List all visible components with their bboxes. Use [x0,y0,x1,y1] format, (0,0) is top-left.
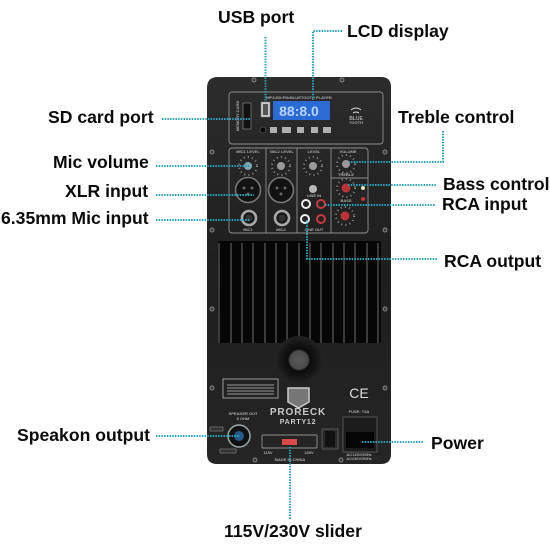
label: LCD display [313,21,449,100]
speakon output: SPEAKER OUT [229,411,258,416]
input section: VOLUME [339,149,357,154]
tone knobs [336,179,355,225]
input section: TREBLE [338,172,354,177]
input section: LINE OUT [305,227,324,232]
speakon output: 8 OHM [237,416,250,421]
SD card slot: MEMORY CARD [235,101,240,131]
power socket: AC230V/50Hz [346,456,372,461]
voltage slider: 230V [304,450,314,455]
input section: LEVEL [308,149,321,154]
LCD display: 88:8.0 [279,103,319,119]
input section: LINE IN [307,193,321,198]
screws [210,78,387,462]
label: RCA output [307,220,541,271]
label: LCD display: LCD display [347,21,449,41]
CE mark: CE [349,385,369,401]
player buttons [270,127,331,133]
brand logo: PRORECK [270,407,326,418]
label: USB port: USB port [218,7,294,27]
label: USB port [218,7,294,101]
input section: MIC1 [243,227,254,232]
label: RCA output: RCA output [444,251,541,271]
input section [229,148,368,233]
player module: MP3•SD•FM•BLUETOOTH PLAYER [266,95,332,100]
power switch [322,429,338,449]
label: XLR input: XLR input [65,181,148,201]
input section: MIC1 LEVEL [236,149,260,154]
warning label [223,379,278,398]
label: 115V/230V slider: 115V/230V slider [224,521,362,541]
bass port [275,336,323,384]
label: Power [362,433,484,453]
player module [229,92,383,144]
bluetooth mark [349,108,363,125]
label: Treble control [349,107,514,162]
power socket [343,409,377,461]
label: Treble control: Treble control [398,107,514,127]
bluetooth mark: BLUE [349,116,363,122]
input section: MIC2 LEVEL [270,149,294,154]
label: RCA input: RCA input [442,194,527,214]
brand logo [270,388,326,426]
label: 6.35mm Mic input: 6.35mm Mic input [1,208,149,228]
label: Mic volume: Mic volume [53,152,149,172]
line in button [309,185,317,193]
SD card slot [235,101,251,131]
heatsink [218,241,381,343]
USB slot [260,102,270,133]
indicator LEDs [361,186,365,201]
LCD display [273,101,330,120]
label: Speakon output: Speakon output [17,425,150,445]
level knobs [239,155,355,175]
power socket: AC115V/60Hz [346,452,372,457]
amplifier panel [207,77,391,464]
speakon output [210,411,258,453]
label: Bass control: Bass control [443,174,550,194]
input section: MIC2 [276,227,287,232]
voltage slider: MADE IN CHINA [275,457,305,462]
bluetooth mark: TOOTH [349,120,363,125]
brand logo: PARTY12 [280,419,316,426]
voltage slider [262,435,317,462]
label: SD card port: SD card port [48,107,154,127]
voltage slider: 115V [263,450,273,455]
power socket: FUSE: T4A [349,409,369,414]
label: Power: Power [431,433,484,453]
RCA connectors [301,200,325,223]
jack inputs [242,211,289,225]
label: 115V/230V slider [224,447,362,541]
input section: BASS [340,198,352,203]
XLR inputs [236,178,294,202]
